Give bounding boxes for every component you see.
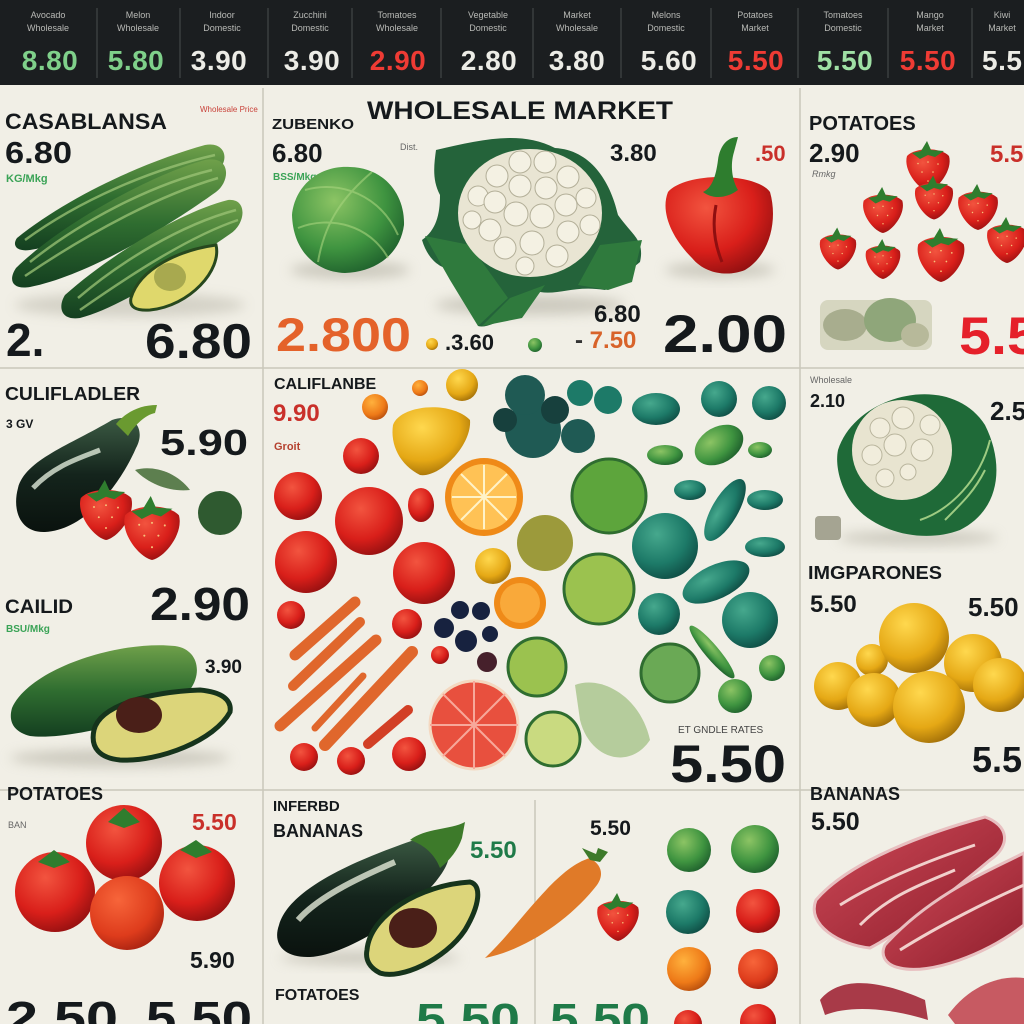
- note: 3 GV: [6, 417, 33, 431]
- price: 5.50: [470, 837, 517, 864]
- price: 2.90: [809, 138, 860, 168]
- illustration: meat cuts: [814, 817, 1024, 1024]
- panel: centre produce mosaic: [273, 369, 786, 794]
- illustration: cauliflower: [422, 138, 642, 327]
- top price ticker bar: Wholesale: [376, 23, 418, 33]
- panel: zucchini and avocado: [5, 105, 258, 369]
- dots grid: [666, 825, 780, 1024]
- price 5.5: 5.5: [972, 739, 1022, 780]
- top price ticker bar: Domestic: [469, 23, 507, 33]
- top price ticker bar: Domestic: [291, 23, 329, 33]
- figure: 3.60: .3.60: [445, 330, 494, 355]
- top price ticker bar: Wholesale: [27, 23, 69, 33]
- orange half: [494, 577, 546, 629]
- price right: 5.50: [968, 592, 1019, 622]
- orange slice: [445, 458, 523, 536]
- dark leafy greens: [493, 375, 622, 458]
- top price ticker bar: Mango: [916, 10, 944, 20]
- heading: IMGPARONES: [808, 563, 942, 583]
- top price ticker bar: Avocado: [31, 10, 65, 20]
- top price ticker bar: Potatoes: [737, 10, 773, 20]
- illustration: green cabbage: [290, 167, 410, 279]
- price .50 red: .50: [755, 141, 786, 166]
- top price ticker bar: Market: [916, 23, 944, 33]
- illustration: avocado: [367, 882, 478, 974]
- blueberries: [434, 601, 498, 672]
- heading: INFERBD: [273, 798, 340, 815]
- figure: 2.00: 2.00: [663, 305, 787, 364]
- top price ticker bar: Vegetable: [468, 10, 508, 20]
- top price ticker bar: 2.80: [461, 45, 517, 76]
- price left: 5.50: [810, 591, 857, 618]
- price red: 5.5: [990, 141, 1023, 168]
- unit label: KG/Mkg: [6, 173, 48, 185]
- heading: BANANAS: [810, 784, 900, 804]
- illustration: eggplant: [16, 405, 157, 532]
- panel: wholesale market centre top: [272, 97, 787, 364]
- yellow peppers: [362, 369, 478, 475]
- title: WHOLESALE MARKET: [367, 97, 673, 125]
- price: 6.80: 6.80: [5, 135, 72, 170]
- heading Cailid: CAILID: [5, 597, 73, 618]
- price 3.90: 3.90: [205, 657, 242, 678]
- heading: CULIFLADLER: [5, 384, 140, 404]
- small caption: ET GNDLE RATES: [678, 725, 764, 736]
- top price ticker bar: 2.90: [370, 45, 426, 76]
- top price ticker bar: Market: [741, 23, 769, 33]
- heading: Zubenko: ZUBENKO: [272, 116, 354, 133]
- illustration: eggplant: [277, 822, 465, 965]
- top price ticker bar: Indoor: [209, 10, 235, 20]
- figure: 6.80 / 7.50: - 7.50: [575, 327, 636, 354]
- top price ticker bar: 5.80: [108, 45, 164, 76]
- illustration: lemons: [814, 603, 1024, 743]
- small produce crumbs: [426, 338, 542, 352]
- illustration: strawberries: [80, 480, 180, 560]
- top price ticker bar: 3.90: [284, 45, 340, 76]
- top price ticker bar: 8.80: [22, 45, 78, 76]
- note: Wholesale: [810, 375, 852, 385]
- illustration: strawberry: [597, 893, 639, 941]
- top price ticker bar: 3.90: [191, 45, 247, 76]
- top price ticker bar: 5.50: [900, 45, 956, 76]
- golden bits: [475, 515, 573, 584]
- green bud: [198, 491, 242, 535]
- carrots: [280, 602, 412, 745]
- top price ticker bar: [0, 0, 1024, 85]
- note: BAN: [8, 820, 27, 830]
- illustration: zucchinis: [12, 144, 245, 318]
- top price ticker bar: 5.5: [982, 45, 1022, 76]
- red tomato cluster: [274, 438, 455, 775]
- top price ticker bar: Wholesale: [556, 23, 598, 33]
- illustration: tomatoes: [15, 805, 235, 950]
- kiwi slices: [508, 459, 699, 766]
- price 2.10: 2.10: [810, 391, 845, 411]
- small notes: Dist.: [400, 142, 418, 152]
- panel: meat bottom right: [810, 784, 1024, 1024]
- heading: POTATOES: [7, 784, 103, 804]
- figure: 6.80 / 7.50: [575, 301, 641, 354]
- unit: Groit: [274, 441, 301, 453]
- heading Fotatoes: FOTATOES: [275, 987, 360, 1004]
- panel: cabbage and lemons right: [808, 375, 1024, 780]
- small icon: [815, 516, 841, 540]
- top price ticker bar: 3.80: [549, 45, 605, 76]
- price 3.80: 3.80: [610, 140, 657, 167]
- panel: tomatoes bottom left: [6, 784, 252, 1024]
- illustration: avocado: [10, 645, 230, 767]
- teal and green produce: [632, 381, 786, 713]
- illustration: red pepper: [665, 137, 775, 278]
- sketch of produce: [820, 298, 932, 350]
- top price ticker bar: Kiwi: [994, 10, 1010, 20]
- top price ticker bar: Melon: [126, 10, 150, 20]
- pale leaves: [575, 682, 650, 757]
- figure: blurred orange price: 2.800: [276, 308, 411, 361]
- price 5.90: 5.90: [190, 947, 235, 973]
- panel: eggplant and avocado bottom centre: [273, 798, 520, 1024]
- panel: strawberries top right: [809, 113, 1024, 366]
- avocado half: [131, 245, 217, 310]
- heading: CALIFLANBE: [274, 376, 377, 393]
- price: 6.80: [272, 138, 323, 168]
- top price ticker bar: Market: [563, 10, 591, 20]
- small red note: Wholesale Price: [200, 105, 258, 114]
- note: Rmkg: [812, 169, 836, 179]
- top price ticker bar: Melons: [651, 10, 681, 20]
- unit: BSS/Mkg: [273, 172, 316, 183]
- top price ticker bar: Tomatoes: [823, 10, 863, 20]
- illustration: cabbage with cauliflower: [837, 394, 998, 545]
- price 2.90: 2.90: [150, 578, 250, 630]
- top price ticker bar: 5.50: [728, 45, 784, 76]
- price: 5.50: [590, 817, 631, 840]
- top price ticker bar: 5.60: [641, 45, 697, 76]
- top price ticker bar: 5.50: [817, 45, 873, 76]
- top price ticker bar: Zucchini: [293, 10, 327, 20]
- grapefruit slice: [430, 681, 518, 769]
- top price ticker bar: Domestic: [824, 23, 862, 33]
- heading: POTATOES: [809, 113, 916, 135]
- top price ticker bar: Wholesale: [117, 23, 159, 33]
- panel: zucchini and avocado: 6.80: [145, 315, 252, 369]
- leaf sprig: [135, 468, 190, 490]
- illustration: strawberries: [820, 141, 1024, 282]
- top price ticker bar: Domestic: [203, 23, 241, 33]
- price 5.50: 5.50: [670, 735, 786, 794]
- panel: eggplant and strawberries left: [5, 384, 250, 767]
- price red: 9.90: [273, 400, 320, 427]
- top price ticker bar: Tomatoes: [377, 10, 417, 20]
- top price ticker bar: Domestic: [647, 23, 685, 33]
- price: 5.90: [160, 422, 248, 463]
- price: 5.50: [811, 808, 860, 836]
- tomato stems: [38, 808, 212, 868]
- illustration: carrot: [485, 848, 608, 958]
- large figures: 2.: [6, 314, 44, 366]
- heading: Casablansa: CASABLANSA: [5, 109, 167, 134]
- figure: 6.80 / 7.50: 6.80: [594, 301, 641, 328]
- note: BSU/Mkg: [6, 624, 50, 635]
- top price ticker bar: Market: [988, 23, 1016, 33]
- price: 5.50: [192, 809, 237, 835]
- panel: produce bottom centre right: [485, 817, 780, 1024]
- heading Bananas: BANANAS: [273, 821, 363, 841]
